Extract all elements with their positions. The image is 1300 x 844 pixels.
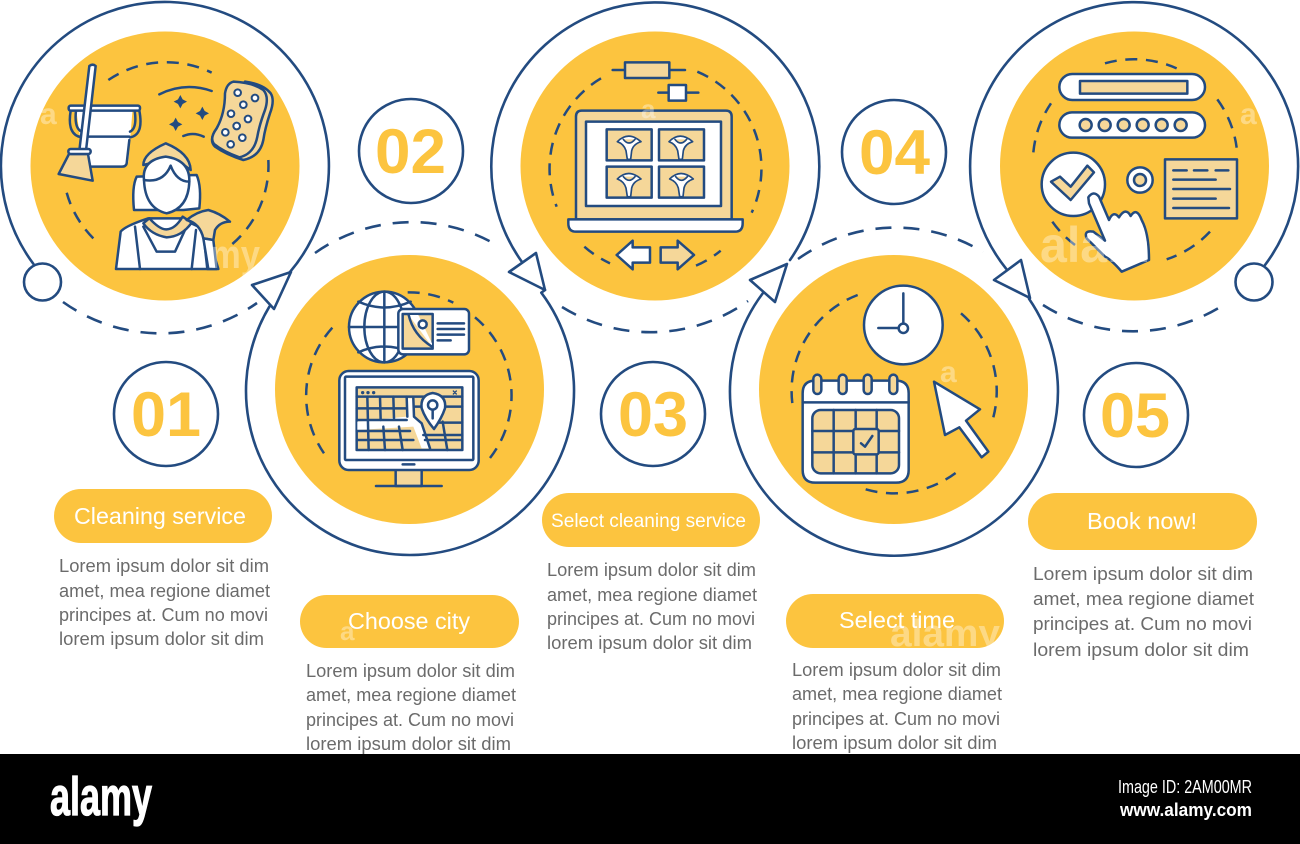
- pill heading: Cleaning service: Cleaning service: [74, 503, 246, 529]
- watermark text: alamy: [890, 613, 1000, 655]
- dashed arc: step 2: [315, 222, 500, 253]
- dashed arc: step 3: [562, 301, 748, 332]
- arrow: step 1 to step 2: [252, 272, 291, 309]
- number badge: 02: [359, 99, 463, 203]
- dashed arc: step 1: [63, 302, 257, 333]
- number badge: 05: 05: [1100, 381, 1170, 451]
- text block: step 3: Lorem ipsum dolor sit dim: [547, 560, 756, 580]
- watermark text: alam: [1040, 217, 1150, 273]
- pill heading: Select time: [786, 594, 1004, 648]
- number badge: 03: 03: [618, 380, 688, 450]
- pill heading: Select cleaning service: [542, 493, 760, 547]
- ring: step 2: [246, 290, 574, 555]
- pill heading: Choose city: [300, 595, 519, 648]
- watermark text: a: [940, 356, 957, 389]
- yellow disc: step 4: [759, 255, 1028, 524]
- watermark text: [40, 94, 1257, 655]
- yellow disc: step 5: [1000, 32, 1269, 300]
- text block: step 3: lorem ipsum dolor sit dim: [547, 633, 752, 653]
- watermark text: a: [1240, 98, 1257, 131]
- panel: step 2 choose city: [246, 99, 574, 754]
- number badge: 04: [842, 100, 946, 204]
- text block: step 3: amet, mea regione diamet: [547, 585, 757, 605]
- number badge: 01: 01: [131, 380, 201, 450]
- text block: step 4: Lorem ipsum dolor sit dim: [792, 660, 1001, 680]
- watermark text: a: [340, 616, 355, 646]
- text block: step 2: principes at. Cum no movi: [306, 710, 514, 730]
- dashed arc: step 5: [1043, 302, 1228, 331]
- icon: map on monitor with globe and location card: [306, 292, 512, 486]
- text block: step 1: principes at. Cum no movi: [59, 605, 268, 625]
- text block: step 4: [792, 660, 1002, 753]
- footer: image id: Image ID: 2AM00MR: [1118, 777, 1252, 797]
- pill heading: Choose city: Choose city: [348, 608, 471, 634]
- number badge: 05: [1084, 363, 1188, 467]
- ring: step 3: [491, 2, 819, 262]
- watermark text: a: [641, 94, 656, 124]
- pill heading: Book now!: Book now!: [1087, 508, 1197, 534]
- watermark text: my: [210, 233, 261, 277]
- footer logo: alamy: alamy: [50, 767, 152, 827]
- number badge: 04: 04: [859, 118, 930, 188]
- watermark text: a: [40, 98, 57, 131]
- icon: maid with mop bucket and sponge: [59, 62, 273, 269]
- panel: step 3 select cleaning service: [491, 2, 819, 653]
- icon: login form with checkmark and tapping hand: [1033, 59, 1237, 272]
- node: start circle: [24, 264, 61, 300]
- pill heading: Select cleaning service: Select cleaning service: [551, 510, 746, 532]
- text block: step 2: [306, 661, 516, 754]
- text block: step 4: lorem ipsum dolor sit dim: [792, 733, 997, 753]
- arrow: step 3 to step 4: [750, 264, 787, 302]
- yellow disc: step 1: [30, 32, 300, 300]
- number badge: 02: 02: [375, 117, 446, 187]
- text block: step 5: lorem ipsum dolor sit dim: [1033, 640, 1249, 660]
- icon: laptop with photo gallery: [550, 62, 761, 269]
- yellow disc: step 2: [275, 255, 544, 524]
- text block: step 1: [59, 556, 270, 649]
- icon: clock calendar and cursor: [792, 286, 997, 493]
- text block: step 5: principes at. Cum no movi: [1033, 614, 1252, 634]
- ring: step 5: [970, 2, 1298, 269]
- arrow: step 4 to step 5: [994, 260, 1030, 298]
- panel: step 1 cleaning service: [1, 2, 329, 649]
- text block: step 2: lorem ipsum dolor sit dim: [306, 734, 511, 754]
- panel: step 4 select time: [730, 100, 1058, 753]
- node: end circle: [1236, 264, 1272, 300]
- ring: step 4: [730, 293, 1058, 556]
- text block: step 1: Lorem ipsum dolor sit dim: [59, 556, 269, 576]
- arrow: step 2 to step 3: [509, 253, 545, 290]
- text block: step 2: amet, mea regione diamet: [306, 685, 516, 705]
- text block: step 5: Lorem ipsum dolor sit dim: [1033, 564, 1253, 584]
- number badge: 03: [601, 362, 705, 466]
- text block: step 1: amet, mea regione diamet: [59, 581, 270, 601]
- panel: step 5 book now: [970, 2, 1298, 660]
- pill heading: Select time: Select time: [839, 607, 955, 633]
- yellow disc: step 3: [520, 32, 790, 300]
- ring: step 1: [1, 2, 329, 272]
- text block: step 2: Lorem ipsum dolor sit dim: [306, 661, 515, 681]
- text block: step 3: [547, 560, 757, 653]
- pill heading: Book now!: [1028, 493, 1257, 550]
- pill heading: Cleaning service: [54, 489, 272, 543]
- footer bar: [0, 754, 1300, 844]
- text block: step 4: principes at. Cum no movi: [792, 709, 1000, 729]
- footer: website: www.alamy.com: [1119, 800, 1252, 820]
- number badge: 01: [114, 362, 218, 466]
- text block: step 5: amet, mea regione diamet: [1033, 589, 1254, 609]
- text block: step 1: lorem ipsum dolor sit dim: [59, 629, 264, 649]
- text block: step 5: [1033, 564, 1254, 660]
- text block: step 4: amet, mea regione diamet: [792, 684, 1002, 704]
- dashed arc: step 4: [798, 228, 983, 259]
- text block: step 3: principes at. Cum no movi: [547, 609, 755, 629]
